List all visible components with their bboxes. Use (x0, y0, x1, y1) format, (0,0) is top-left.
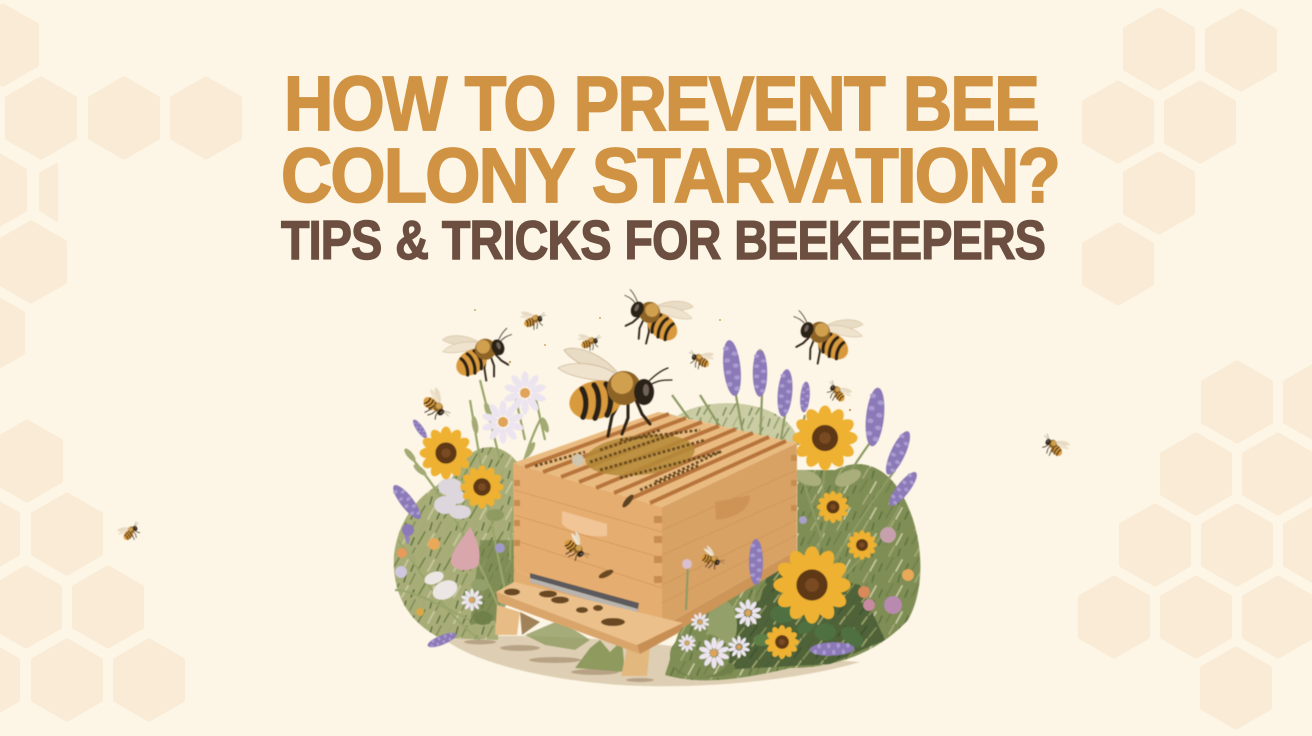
sunflowers behind hive (420, 405, 877, 560)
title (281, 61, 1059, 271)
honeycomb pattern: bottom right (1081, 364, 1312, 726)
white and lilac cluster (434, 478, 471, 519)
honeycomb pattern: top right (1085, 10, 1274, 302)
bees on landing board (504, 568, 625, 626)
entrance slot (530, 573, 639, 615)
hive top frame (513, 412, 797, 507)
honeycomb pattern: top left (0, 6, 239, 372)
hive front-left face (513, 463, 662, 627)
worker bees on frame (535, 429, 722, 509)
bees: flying around hive (416, 278, 867, 574)
wildflower clusters (395, 371, 914, 616)
landing board (496, 582, 683, 645)
ground soil (445, 620, 860, 686)
white cluster (423, 569, 461, 604)
foliage: left meadow (394, 380, 551, 640)
foliage: back stems behind hive (660, 390, 805, 445)
corner box joints (514, 455, 797, 583)
illustration: hive, flowers and bees (389, 278, 921, 686)
hive hand holds (562, 511, 607, 536)
wooden hive box (496, 412, 797, 654)
bees: large bee on hive (558, 348, 672, 436)
pink cluster (451, 527, 480, 570)
honeycomb pattern: bottom left (0, 422, 182, 718)
hive bottom box base (514, 570, 662, 640)
subtitle: TIPS & TRICKS FOR BEEKEEPERS (281, 209, 1045, 271)
daisies upper left (503, 371, 547, 415)
hive legs (495, 605, 650, 676)
foliage: right meadow (665, 440, 920, 680)
lavender spikes (389, 339, 921, 657)
lone bee: right side (1037, 429, 1071, 462)
title line 2: COLONY STARVATION? (281, 133, 1059, 219)
small orange and lilac blooms (395, 516, 914, 616)
foreground sunflowers and daisies (670, 539, 851, 677)
hive right face (662, 443, 797, 627)
lone bee: left side (116, 518, 145, 545)
title line 1: HOW TO PREVENT BEE (284, 61, 1038, 147)
pollen specks (424, 309, 851, 411)
